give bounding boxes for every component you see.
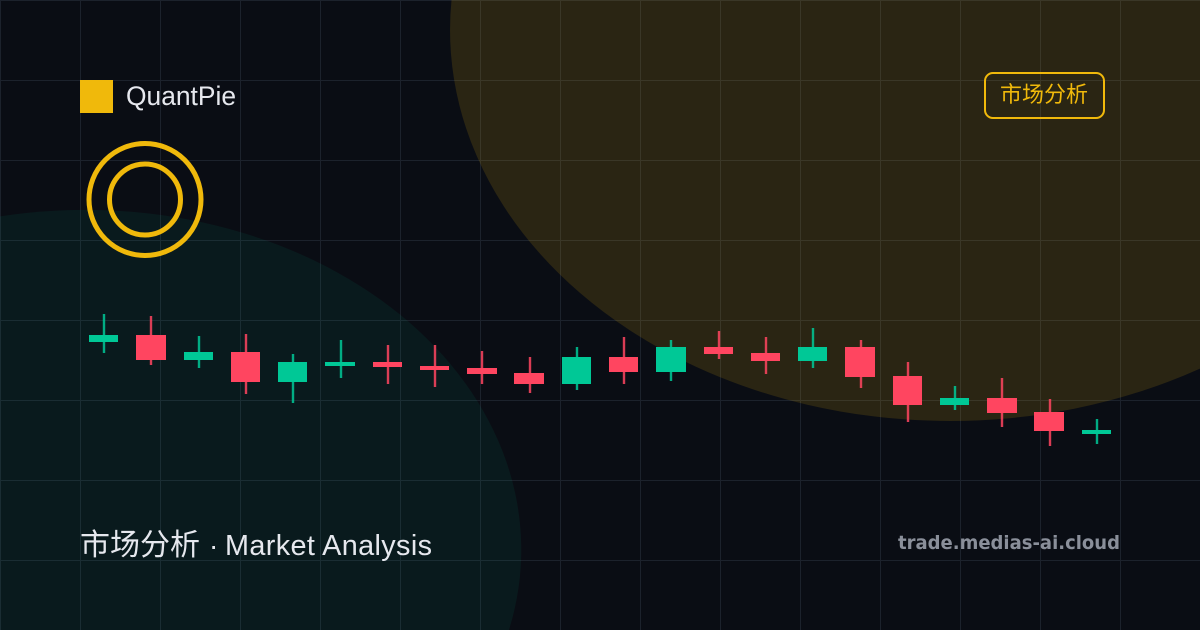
footer title: · — [209, 530, 218, 561]
background blob: teal ellipse — [0, 210, 521, 630]
background blob: yellow ellipse — [450, 0, 1200, 421]
logo — [80, 80, 236, 113]
footer title: Market Analysis — [225, 530, 432, 562]
candlestick chart — [89, 314, 1111, 446]
badge: 市场分析 — [1000, 82, 1088, 107]
footer title: 市场分析 — [80, 529, 200, 562]
brand name: QuantPie — [126, 81, 236, 111]
logo square — [80, 80, 113, 113]
icon: concentric rings — [89, 144, 201, 256]
footer url: trade.medias-ai.cloud — [898, 532, 1120, 554]
badge — [985, 73, 1104, 118]
footer title — [80, 529, 432, 562]
